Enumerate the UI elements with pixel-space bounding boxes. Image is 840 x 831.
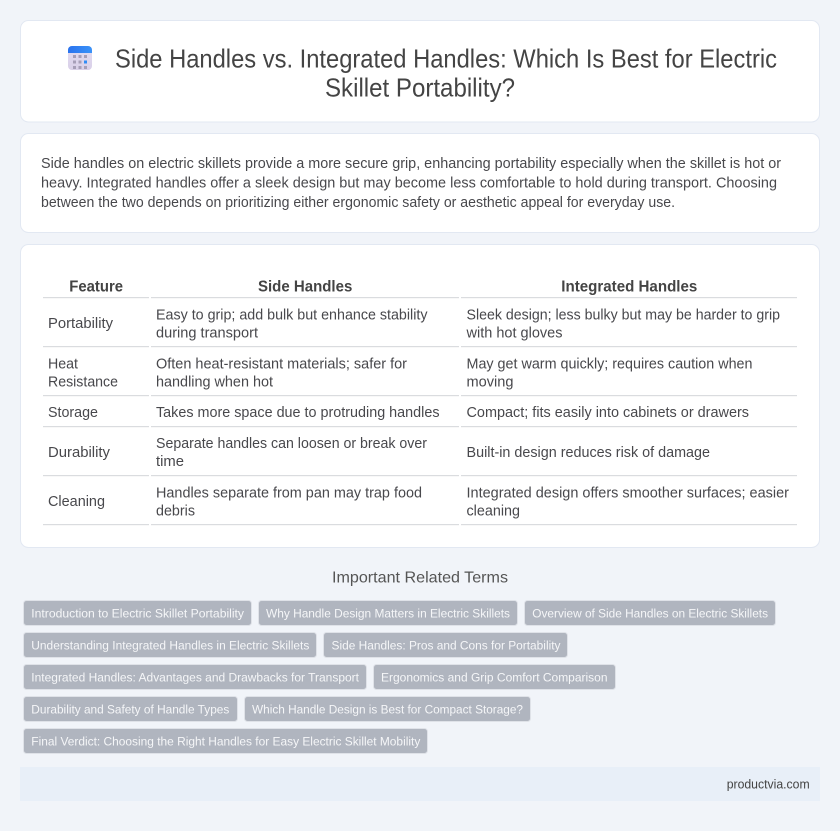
footer: productvia.com	[727, 776, 810, 791]
row: cleaning: debris	[156, 502, 195, 519]
heading: important related terms: Important Related Terms	[332, 570, 508, 587]
tag: Durability and Safety of Handle Types	[31, 702, 229, 716]
row: durability: Built-in design reduces risk of damage	[466, 444, 710, 461]
row: heat resistance: moving	[466, 373, 514, 390]
table header	[69, 279, 697, 296]
tag: Side Handles: Pros and Cons for Portability	[332, 638, 561, 652]
row: durability	[48, 435, 710, 470]
row: portability: Easy to grip; add bulk but enhance stability	[156, 306, 428, 323]
table header: Integrated Handles	[561, 279, 697, 296]
tag: Understanding Integrated Handles in Electric Skillets	[31, 638, 309, 652]
row: portability: during transport	[156, 324, 259, 341]
row: heat resistance: Heat	[48, 355, 79, 372]
panel: introduction	[20, 134, 820, 232]
tag	[524, 600, 776, 626]
row: portability	[48, 306, 780, 341]
row: heat resistance: handling when hot	[156, 373, 274, 390]
row: heat resistance	[48, 355, 752, 390]
tag	[244, 696, 530, 722]
row: heat resistance: May get warm quickly; requires caution when	[466, 355, 752, 372]
row: storage	[48, 404, 749, 421]
footer	[20, 767, 820, 801]
row: durability: Durability	[48, 444, 110, 461]
text block: introduction: heavy. Integrated handles offer a sleek design but may become less comfortable to hold during transport. Choosing	[41, 174, 777, 192]
tag	[374, 664, 616, 690]
text block: introduction: Side handles on electric skillets provide a more secure grip, enhancing portability especially when the skillet is hot or	[41, 155, 781, 172]
tag	[24, 600, 252, 626]
row: storage: Storage	[48, 404, 98, 421]
tag	[24, 664, 366, 690]
table header: Feature	[69, 279, 123, 296]
tag	[24, 632, 316, 658]
row: cleaning: Cleaning	[48, 493, 105, 510]
tag: Introduction to Electric Skillet Portability	[31, 606, 245, 620]
icon: calendar	[68, 46, 92, 70]
row: storage: Compact; fits easily into cabinets or drawers	[466, 404, 749, 421]
row: portability: with hot gloves	[466, 324, 562, 341]
row: portability: Portability	[48, 315, 113, 332]
tag: Integrated Handles: Advantages and Drawbacks for Transport	[31, 670, 360, 684]
tag	[258, 600, 518, 626]
panel: comparison table	[20, 244, 820, 548]
row: portability: Sleek design; less bulky but may be harder to grip	[466, 306, 780, 323]
text block: introduction: between the two depends on prioritizing either ergonomic safety or aesthetic appeal for everyday use.	[41, 194, 675, 211]
row: cleaning: cleaning	[466, 502, 520, 519]
panel: header	[20, 20, 820, 122]
row: storage: Takes more space due to protruding handles	[156, 404, 440, 421]
row: cleaning	[48, 484, 789, 519]
tag	[24, 696, 238, 722]
tag: Final Verdict: Choosing the Right Handles for Easy Electric Skillet Mobility	[31, 734, 421, 748]
title: Skillet Portability?	[325, 75, 515, 103]
row: cleaning: Handles separate from pan may trap food	[156, 484, 422, 501]
row: heat resistance: Often heat-resistant materials; safer for	[156, 355, 407, 372]
row: durability: time	[156, 453, 184, 470]
tag: Why Handle Design Matters in Electric Skillets	[266, 606, 510, 620]
tag	[24, 728, 428, 754]
title	[115, 46, 777, 103]
tag: Ergonomics and Grip Comfort Comparison	[381, 670, 608, 684]
title: Side Handles vs. Integrated Handles: Which Is Best for Electric	[115, 46, 777, 74]
table header: Side Handles	[258, 279, 352, 296]
tags: related terms	[24, 600, 776, 754]
text block: introduction	[41, 155, 781, 211]
tag	[324, 632, 568, 658]
tag: Which Handle Design is Best for Compact Storage?	[252, 702, 523, 716]
row: durability: Separate handles can loosen or break over	[156, 435, 427, 452]
row: cleaning: Integrated design offers smoother surfaces; easier	[466, 484, 789, 501]
row: heat resistance: Resistance	[48, 373, 118, 390]
tag: Overview of Side Handles on Electric Skillets	[532, 606, 768, 620]
